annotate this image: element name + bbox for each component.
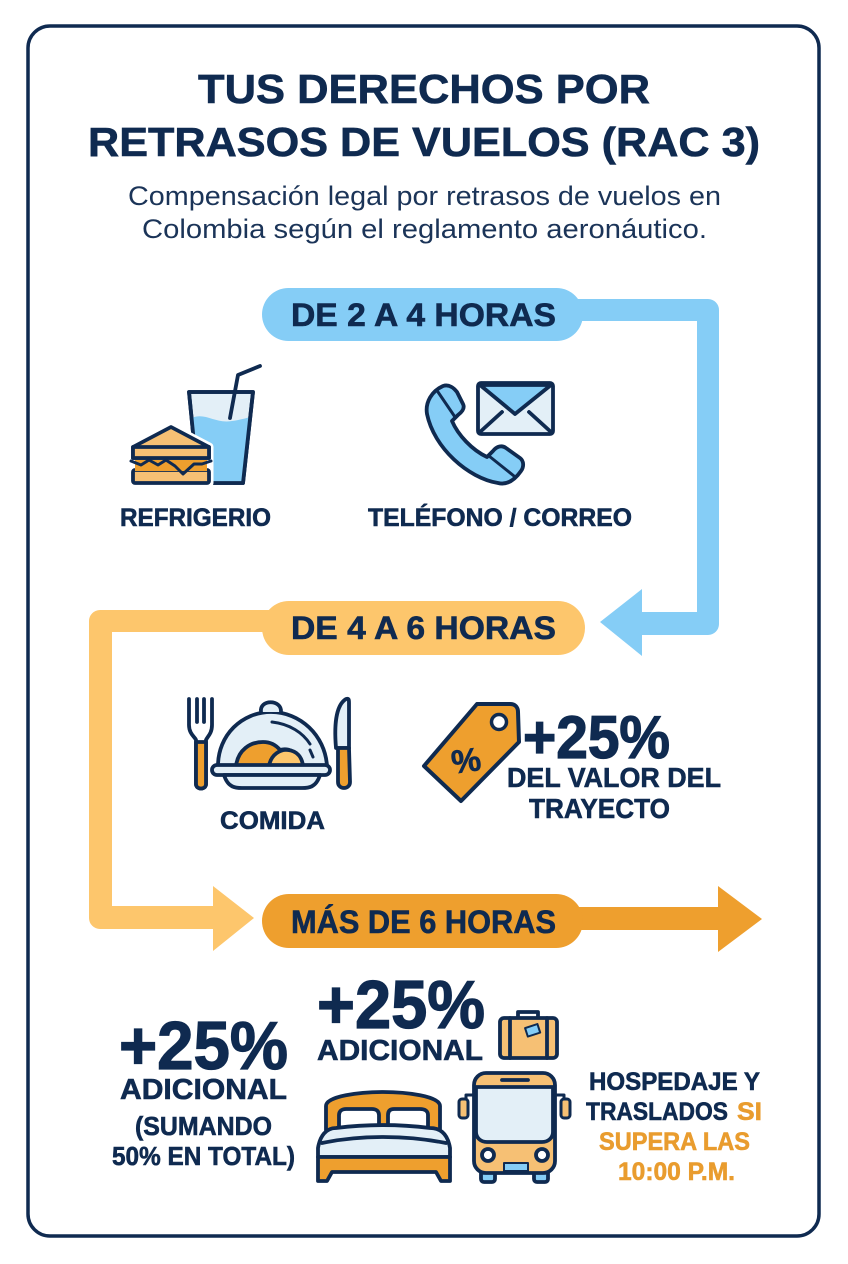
stat: +25% del valor del trayecto: +25% — [523, 704, 670, 771]
icon: suitcase — [500, 1012, 557, 1058]
arrow: orange connector to final stage — [89, 610, 280, 951]
icon: discount tag — [424, 704, 519, 801]
stat: +25% adicional, sumando 50%: (SUMANDO — [135, 1111, 272, 1141]
stage pill: de 4 a 6 horas — [262, 601, 585, 655]
label: comida: COMIDA — [220, 807, 325, 835]
text: hospedaje y traslados: TRASLADOS — [586, 1098, 728, 1126]
stat: +25% adicional, sumando 50% — [112, 1008, 295, 1171]
arrow: blue connector to orange stage — [560, 299, 719, 656]
text: hospedaje y traslados: SI — [737, 1098, 762, 1126]
title: TUS DERECHOS POR — [198, 66, 650, 112]
icon: phone and envelope — [427, 383, 553, 484]
stage pill: mas de 6 horas — [262, 894, 583, 948]
subtitle — [128, 181, 721, 244]
text: hospedaje y traslados: SUPERA LAS — [599, 1128, 750, 1156]
icon: discount tag: % — [449, 740, 483, 781]
title — [88, 66, 760, 165]
icon: covered meal with cutlery — [189, 699, 350, 788]
subtitle: Compensación legal por retrasos de vuelos en — [128, 181, 721, 211]
stat: +25% adicional, sumando 50%: 50% EN TOTAL) — [112, 1141, 295, 1171]
stage pill: de 2 a 4 horas: DE 2 A 4 HORAS — [291, 297, 556, 333]
stat: +25% del valor del trayecto — [507, 704, 721, 824]
stat: +25% adicional, sumando 50%: +25% — [119, 1008, 288, 1084]
stage pill: de 4 a 6 horas: DE 4 A 6 HORAS — [291, 610, 556, 646]
stage pill: mas de 6 horas: MÁS DE 6 HORAS — [291, 904, 556, 940]
label: refrigerio: REFRIGERIO — [120, 504, 271, 532]
text: hospedaje y traslados: 10:00 P.M. — [618, 1158, 735, 1186]
stat: +25% del valor del trayecto: TRAYECTO — [529, 793, 670, 824]
icon: bus — [459, 1073, 570, 1182]
stat: +25% adicional, sumando 50%: ADICIONAL — [120, 1074, 287, 1106]
label: telefono / correo: TELÉFONO / CORREO — [368, 503, 632, 532]
stage pill: de 2 a 4 horas — [262, 288, 583, 341]
icon: bed — [318, 1092, 450, 1181]
stat: +25% adicional: ADICIONAL — [317, 1035, 483, 1067]
stat: +25% del valor del trayecto: DEL VALOR DEL — [507, 762, 721, 793]
text: hospedaje y traslados — [586, 1068, 762, 1186]
arrow: final stage outgoing arrow — [560, 886, 762, 952]
stat: +25% adicional: +25% — [317, 967, 485, 1043]
subtitle: Colombia según el reglamento aeronáutico. — [142, 214, 707, 244]
title: RETRASOS DE VUELOS (RAC 3) — [88, 119, 760, 165]
text: hospedaje y traslados: HOSPEDAJE Y — [589, 1068, 760, 1096]
icon: sandwich and drink — [131, 366, 260, 483]
